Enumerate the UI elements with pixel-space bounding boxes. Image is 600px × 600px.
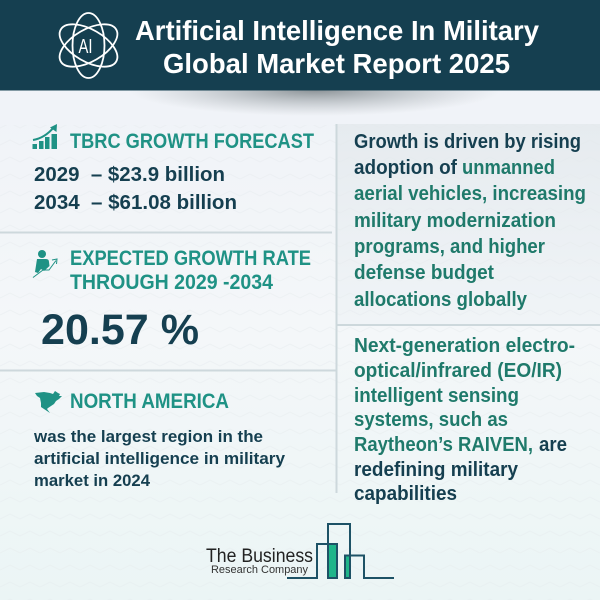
growth drivers text: unmanned (462, 156, 555, 179)
heading: expected growth rate: THROUGH 2029 -2034 (70, 270, 273, 294)
panel: growth rate (33, 246, 311, 354)
heading: TBRC growth forecast: TBRC GROWTH FORECAST (70, 129, 314, 153)
growth drivers text: Growth is driven by rising (354, 130, 581, 153)
growth drivers text: military modernization (354, 209, 556, 232)
logo: The Business Research Company (206, 524, 394, 578)
panel: North America (33, 389, 286, 490)
region text: was the largest region in the (33, 427, 263, 446)
icon: AI atom: AI (78, 36, 92, 58)
growth drivers text (354, 130, 586, 311)
header banner (0, 0, 600, 90)
logo bars (287, 524, 394, 578)
growth drivers text: adoption of (354, 156, 457, 179)
title: Artificial Intelligence In Military (135, 15, 539, 46)
region text: artificial intelligence in military (34, 449, 286, 468)
panel: sensing systems text: optical/infrared (EO/IR) (354, 359, 562, 382)
icon: growth bars (32, 124, 57, 149)
growth drivers text: programs, and higher (354, 235, 545, 258)
panel: growth drivers (337, 124, 600, 325)
divider (0, 370, 336, 372)
divider (0, 232, 332, 234)
forecast values (34, 163, 237, 214)
forecast values: 2034 – $61.08 billion (34, 191, 237, 214)
title (135, 15, 539, 79)
region text (33, 427, 286, 490)
icon: North America map (35, 391, 62, 413)
panel: sensing systems text (354, 334, 575, 505)
growth drivers text: allocations globally (354, 288, 528, 311)
growth rate value: 20.57 % (41, 306, 199, 354)
panel: sensing systems text: Next-generation electro- (354, 334, 575, 357)
icon: AI atom (53, 13, 124, 78)
panel: sensing systems text: redefining military (354, 458, 519, 481)
forecast values: 2029 – $23.9 billion (34, 163, 225, 186)
panel: sensing systems text: systems, such as (354, 408, 508, 431)
growth drivers text: defense budget (354, 261, 494, 284)
header shadow (130, 64, 500, 116)
vertical divider (336, 124, 338, 493)
logo wordmark: The Business (206, 546, 313, 567)
heading: North America: NORTH AMERICA (70, 389, 229, 413)
panel: sensing systems text: capabilities (354, 482, 457, 505)
region text: market in 2024 (34, 471, 151, 490)
panel: sensing systems text: intelligent sensing (354, 384, 519, 407)
panel: forecast (32, 124, 314, 214)
icon: person with arrow (33, 250, 57, 278)
panel: sensing systems text: are (539, 433, 567, 456)
title: Global Market Report 2025 (163, 48, 510, 79)
panel: sensing systems text: Raytheon’s RAIVEN, (354, 433, 533, 456)
heading: expected growth rate: EXPECTED GROWTH RATE (70, 246, 311, 270)
heading: expected growth rate (70, 246, 311, 294)
logo: The Business Research Company: Research Company (211, 564, 308, 576)
